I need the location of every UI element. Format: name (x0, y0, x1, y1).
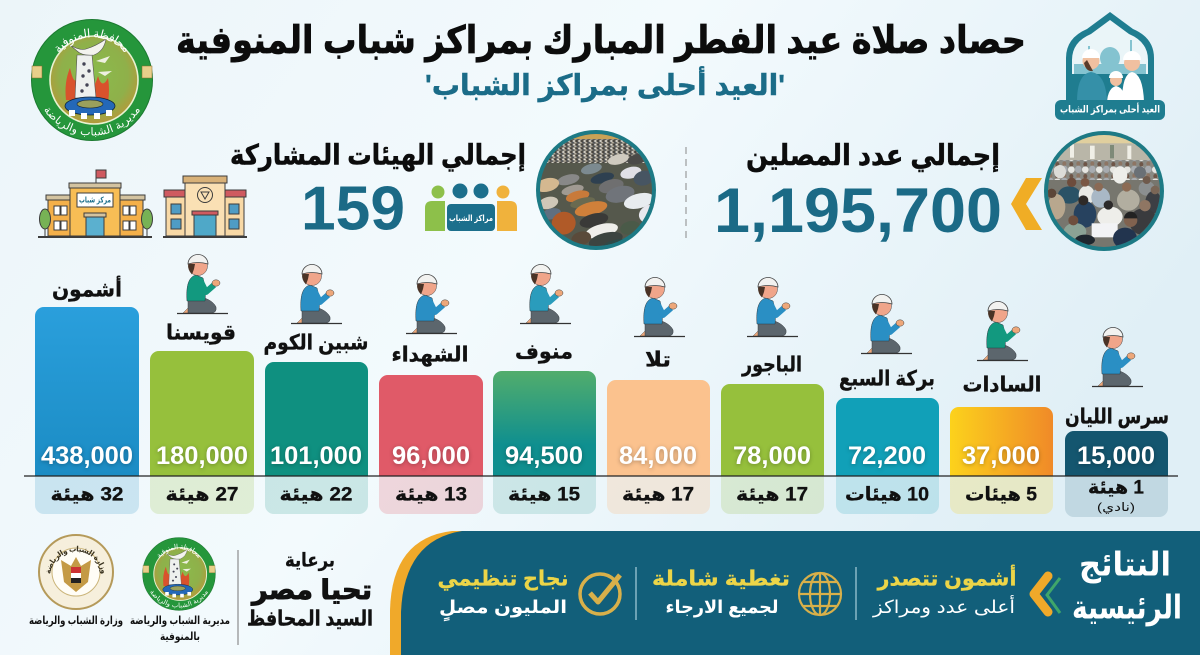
logo: directorate small (142, 537, 216, 611)
result: Ashmoun leads (872, 564, 1016, 618)
result: Ashmoun leads: أشمون تتصدر (877, 564, 1016, 590)
bar: Berket El Sabaa: بركة السبع (839, 368, 935, 390)
bar: El Sadat: 5 هيئات (965, 484, 1037, 506)
icon: youth centre building (38, 170, 152, 237)
stat: participating bodies (230, 140, 526, 244)
label: directorate: بالمنوفية (160, 631, 200, 643)
bar chart: worshippers by centre (35, 274, 1169, 517)
bar: Quesna (150, 322, 254, 514)
result: full coverage (652, 568, 790, 618)
badge: Eid at youth centres: العيد أحلى بمراكز الشباب (1060, 102, 1160, 116)
photo: prostrating worshippers (536, 130, 656, 250)
bar: Ashmoun: 32 هيئة (51, 484, 124, 506)
result: organisational success: المليون مصلٍ (439, 597, 567, 622)
result: full coverage: لجميع الارجاء (666, 597, 778, 618)
bar: Berket El Sabaa (836, 368, 939, 514)
bar: Shibin El Kom: 22 هيئة (280, 484, 352, 506)
bar: El Bagour (721, 354, 824, 514)
bar: Ashmoun: 438,000 (41, 442, 133, 470)
logo: ministry of youth and sports (38, 534, 114, 610)
bar: Shibin El Kom (264, 332, 368, 514)
icon: globe (799, 573, 841, 615)
bar: El Shohada: 96,000 (392, 442, 470, 470)
bar: Sers El Layan: (نادي) (1097, 500, 1135, 514)
bar: Berket El Sabaa: 72,200 (848, 442, 926, 470)
bar: Quesna: 180,000 (156, 442, 248, 470)
stat: participating bodies: 159 (301, 174, 405, 244)
bar: Sers El Layan: 1 هيئة (1088, 478, 1144, 498)
bar: Menouf: منوف (515, 340, 573, 364)
icon: youth centres group: مراكز الشباب (449, 213, 493, 224)
bar: Menouf: 94,500 (505, 442, 583, 470)
bar: Shibin El Kom: 101,000 (270, 442, 362, 470)
bar: El Shohada (379, 344, 483, 514)
heading: key results: النتائج (1079, 546, 1171, 584)
bar: El Sadat (950, 374, 1053, 514)
logo: Monufia youth directorate (31, 19, 153, 141)
subtitle: 'العيد أحلى بمراكز الشباب' (425, 66, 785, 102)
photo: worshippers crowd (1044, 131, 1164, 251)
bar: El Shohada: الشهداء (392, 344, 468, 366)
sponsor block: برعاية (285, 550, 335, 572)
stat: total worshippers (714, 140, 1002, 246)
logo: directorate small: مديرية الشباب والرياضة (150, 590, 208, 608)
bar: Menouf (493, 340, 596, 514)
bar: Quesna: قويسنا (166, 322, 236, 344)
bar: Tala (607, 348, 710, 514)
label: ministry: وزارة الشباب والرياضة (29, 615, 123, 627)
stat: participating bodies: إجمالي الهيئات المشاركة (230, 140, 526, 172)
bar: Sers El Layan: 15,000 (1077, 442, 1155, 470)
bar: Tala: تلا (645, 348, 671, 372)
logo: ministry of youth and sports: وزارة الشباب والرياضة (46, 546, 104, 574)
badge: Eid at youth centres (1055, 12, 1165, 120)
result: organisational success (438, 568, 568, 622)
bar: Berket El Sabaa: 10 هيئات (845, 484, 929, 506)
icons: praying boys above bars (177, 254, 1143, 386)
arrow: double chevron (1034, 576, 1060, 613)
icon: building with emblem (163, 176, 247, 237)
label: directorate: مديرية الشباب والرياضة (130, 615, 230, 627)
icon: check mark (580, 574, 620, 614)
result: organisational success: نجاح تنظيمي (438, 568, 568, 590)
bar: Tala: 17 هيئة (622, 484, 694, 506)
bar: Ashmoun: أشمون (52, 274, 122, 302)
result: full coverage: تغطية شاملة (652, 568, 790, 590)
bar: El Sadat: السادات (962, 374, 1042, 396)
bar: Menouf: 15 هيئة (508, 484, 580, 506)
bar: El Bagour: الباجور (741, 354, 802, 376)
label: directorate (130, 615, 230, 643)
stat: total worshippers: 1,195,700 (714, 176, 1002, 246)
icon: youth centres group (425, 184, 517, 231)
bar: Tala: 84,000 (619, 442, 697, 470)
bar: El Shohada: 13 هيئة (395, 484, 467, 506)
bar: Quesna: 27 هيئة (166, 484, 238, 506)
bar: El Bagour: 17 هيئة (736, 484, 808, 506)
bar: El Sadat: 37,000 (962, 442, 1040, 470)
panel: key results (390, 531, 1200, 655)
stat: total worshippers: إجمالي عدد المصلين (746, 140, 1000, 173)
result: Ashmoun leads: أعلى عدد ومراكز (872, 595, 1015, 618)
sponsor block: تحيا مصر (250, 575, 372, 606)
sponsor block (247, 550, 373, 630)
bar: Shibin El Kom: شبين الكوم (264, 332, 368, 354)
bar: Ashmoun (35, 274, 139, 514)
heading: key results (1072, 546, 1182, 628)
bar: El Bagour: 78,000 (733, 442, 811, 470)
bar: Sers El Layan (1065, 406, 1169, 517)
title: حصاد صلاة عيد الفطر المبارك بمراكز شباب المنوفية (176, 20, 1026, 62)
logo: directorate small: محافظة المنوفية (158, 544, 200, 558)
icon: youth centre building: مركز شباب (79, 196, 111, 204)
logo: Monufia youth directorate: محافظة المنوفية (56, 28, 127, 52)
bar: Sers El Layan: سرس الليان (1065, 406, 1169, 428)
sponsor block: السيد المحافظ (247, 608, 373, 630)
logo: Monufia youth directorate: مديرية الشباب والرياضة (44, 108, 140, 137)
arrow: orange chevron (1011, 178, 1042, 230)
